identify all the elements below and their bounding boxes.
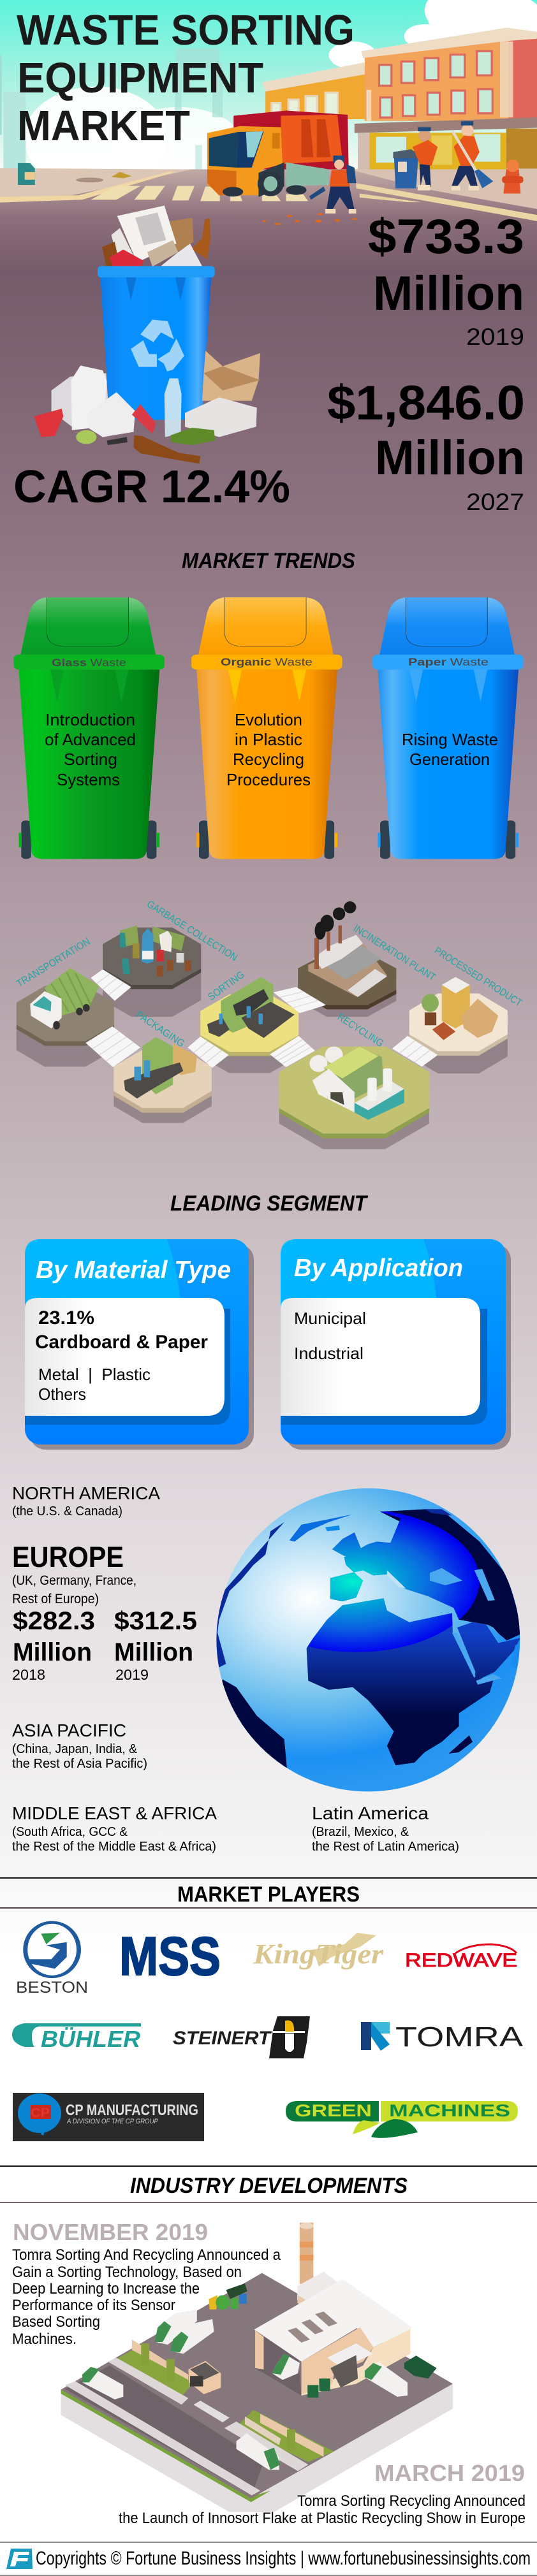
- stage: garbage collection: [103, 926, 201, 989]
- panel: glass waste bin: Systems: [57, 770, 120, 789]
- stat: CAGR: CAGR 12.4%: [13, 462, 290, 513]
- illustration: waste processing flow: TRANSPORTATION: [15, 936, 92, 989]
- panel: paper waste bin: Paper Waste: [408, 656, 489, 668]
- icon: Fortune Business Insights logo: [6, 2549, 33, 2569]
- illustration: waste processing flow: PROCESSED PRODUCT: [432, 945, 524, 1009]
- panel: glass waste bin: Glass Waste: [52, 657, 126, 669]
- logo: CP Manufacturing: A DIVISION OF THE CP GROUP: [66, 2118, 159, 2125]
- region: europe: 2019: [115, 1666, 149, 1683]
- stage: recycling: [279, 1047, 429, 1139]
- bin body: [100, 277, 211, 420]
- development: November 2019: Based Sorting: [12, 2313, 100, 2331]
- region: europe: Rest of Europe): [12, 1592, 99, 1606]
- logo: Green Machines: MACHINES: [389, 2101, 510, 2120]
- logo: Redwave: [405, 1944, 517, 1971]
- development: March 2019: Tomra Sorting Recycling Announced: [297, 2492, 526, 2510]
- panel: by application: Industrial: [294, 1344, 364, 1363]
- region: europe: $312.5: [114, 1607, 197, 1635]
- logo: Green Machines: GREEN: [295, 2101, 372, 2120]
- region: europe: Million: [13, 1638, 92, 1666]
- logo: Tomra: [361, 2021, 524, 2053]
- logo: Tomra: TOMRA: [395, 2021, 524, 2053]
- steps between stages: [85, 970, 438, 1068]
- panel: by material type: Metal | Plastic: [38, 1365, 151, 1384]
- region: asia pacific: ASIA PACIFIC: [12, 1721, 126, 1740]
- logo: CP Manufacturing: CP: [31, 2106, 50, 2120]
- development: March 2019: [119, 2460, 526, 2527]
- recycle symbol: [131, 319, 184, 372]
- region: europe: Million: [114, 1638, 193, 1666]
- logo: Buhler: BÜHLER: [41, 2026, 140, 2052]
- panel: by material type: Cardboard & Paper: [35, 1332, 208, 1353]
- logo: Beston: [16, 1923, 88, 1997]
- region: latin america: (Brazil, Mexico, &: [312, 1825, 409, 1839]
- logo: Green Machines: [286, 2101, 518, 2138]
- region: asia pacific: the Rest of Asia Pacific): [12, 1757, 147, 1771]
- panel: by application: [281, 1239, 511, 1450]
- region: europe: EUROPE: [12, 1541, 124, 1573]
- region: asia pacific: (China, Japan, India, &: [12, 1742, 138, 1756]
- development: November 2019: [12, 2219, 281, 2348]
- fire hydrant: [503, 170, 520, 194]
- panel: by material type: 23.1%: [38, 1307, 94, 1328]
- development: November 2019: Deep Learning to Increase the: [12, 2280, 200, 2297]
- stat: 2019 market value: [368, 210, 524, 350]
- panel: glass waste bin: Sorting: [64, 750, 117, 769]
- heading: market trends: MARKET TRENDS: [182, 549, 355, 573]
- illustration: waste processing flow: RECYCLING: [335, 1012, 385, 1049]
- waste piles: [202, 351, 260, 401]
- region: asia pacific: [12, 1721, 147, 1771]
- development: November 2019: Gain a Sorting Technology, Based on: [12, 2264, 242, 2281]
- panel: glass waste bin: [13, 597, 165, 859]
- region: europe: 2018: [12, 1666, 45, 1683]
- illustration: waste processing flow: INCINERATION PLANT: [351, 923, 438, 984]
- stage: sorting: [200, 977, 298, 1056]
- logo: MSS: MSS: [119, 1926, 221, 1987]
- region: north america: (the U.S. & Canada): [12, 1504, 122, 1518]
- region: north america: NORTH AMERICA: [12, 1483, 160, 1503]
- waste on top of bin: [102, 205, 210, 266]
- logo: CP Manufacturing: [13, 2093, 204, 2141]
- logo: Steinert: [173, 2016, 310, 2058]
- illustration: waste processing flow: SORTING: [206, 970, 247, 1003]
- stat: 2027 market value: [327, 376, 525, 515]
- panel: by application: By Application: [294, 1255, 463, 1282]
- stage: packaging: [114, 1037, 212, 1113]
- trucks: [82, 2310, 408, 2470]
- development: March 2019: MARCH 2019: [374, 2460, 525, 2486]
- region: europe: [12, 1541, 197, 1683]
- illustration: street scene with garbage truck: [0, 0, 537, 273]
- region: europe: (UK, Germany, France,: [12, 1573, 136, 1588]
- panel: by material type: [25, 1239, 254, 1450]
- panel: by material type: By Material Type: [36, 1256, 231, 1284]
- panel: organic waste bin: Evolution: [235, 710, 302, 729]
- heading: market players: MARKET PLAYERS: [177, 1882, 360, 1907]
- bins: [209, 2283, 437, 2398]
- heading: leading segment: LEADING SEGMENT: [170, 1191, 369, 1216]
- panel: by material type: Others: [38, 1385, 86, 1404]
- stage: incineration plant: [298, 901, 396, 1009]
- development: November 2019: NOVEMBER 2019: [13, 2219, 208, 2245]
- logo: King Tiger: KingTiger: [253, 1939, 384, 1970]
- title: MARKET: [17, 102, 190, 150]
- logo: Redwave: REDWAVE: [405, 1950, 517, 1971]
- stat: 2027 market value: $1,846.0: [327, 376, 525, 430]
- illustration: recycling centre: [61, 2223, 453, 2512]
- region: latin america: Latin America: [312, 1803, 429, 1823]
- stage: transportation: [17, 968, 114, 1046]
- region: north america: [12, 1483, 160, 1518]
- illustration: waste processing flow: GARBAGE COLLECTION: [145, 899, 239, 963]
- heading: industry developments: INDUSTRY DEVELOPMENTS: [130, 2174, 408, 2198]
- illustration: waste processing flow: [15, 899, 524, 1149]
- truck: [233, 110, 349, 170]
- development: November 2019: Performance of its Sensor: [12, 2297, 175, 2314]
- region: latin america: the Rest of Latin America): [312, 1840, 459, 1854]
- panel: organic waste bin: [191, 597, 342, 859]
- footer: [0, 2542, 537, 2576]
- panel: organic waste bin: Organic Waste: [221, 656, 313, 668]
- panel: paper waste bin: Generation: [409, 750, 490, 769]
- stat: 2027 market value: 2027: [466, 489, 524, 515]
- region: latin america: [312, 1803, 459, 1854]
- yellow building: [265, 69, 367, 119]
- workers with bin and broom: [394, 154, 418, 188]
- title: EQUIPMENT: [17, 54, 263, 102]
- panel: paper waste bin: [372, 597, 524, 859]
- shop front: [355, 117, 537, 133]
- stage: processed product: [409, 977, 508, 1056]
- logo: Buhler: [12, 2023, 141, 2052]
- region: middle east and africa: [12, 1803, 217, 1854]
- globe: [205, 1488, 524, 1791]
- orange building: [365, 39, 508, 121]
- stat: 2019 market value: $733.3: [368, 210, 524, 264]
- logo: Steinert: STEINERT: [173, 2028, 272, 2049]
- illustration: blue recycling bin with waste: [34, 205, 260, 463]
- panel: glass waste bin: of Advanced: [45, 730, 136, 749]
- panel: organic waste bin: Procedures: [226, 770, 311, 789]
- region: middle east and africa: MIDDLE EAST & AFRICA: [12, 1803, 217, 1823]
- logo: Beston: BESTON: [16, 1979, 88, 1997]
- region: europe: $282.3: [13, 1607, 95, 1635]
- logo: CP Manufacturing: CP MANUFACTURING: [66, 2102, 198, 2119]
- panel: organic waste bin: in Plastic: [235, 730, 302, 749]
- title: [17, 6, 355, 150]
- stat: 2019 market value: Million: [373, 266, 524, 321]
- stat: 2019 market value: 2019: [466, 324, 524, 350]
- panel: by application: Municipal: [294, 1309, 366, 1328]
- region: middle east and africa: (South Africa, GCC &: [12, 1825, 128, 1839]
- stat: 2027 market value: Million: [375, 431, 525, 485]
- region: middle east and africa: the Rest of the Middle East & Africa): [12, 1840, 216, 1854]
- panel: paper waste bin: Rising Waste: [402, 730, 498, 749]
- worker with leaf blower: [334, 156, 344, 163]
- panel: glass waste bin: Introduction: [45, 710, 135, 729]
- title: WASTE SORTING: [17, 6, 355, 54]
- gatehouse and hedges: [132, 2340, 323, 2457]
- development: November 2019: Machines.: [12, 2331, 77, 2348]
- illustration: waste processing flow: PACKAGING: [134, 1009, 186, 1050]
- panel: organic waste bin: Recycling: [233, 750, 304, 769]
- development: November 2019: Tomra Sorting And Recycling Announced a: [12, 2246, 281, 2264]
